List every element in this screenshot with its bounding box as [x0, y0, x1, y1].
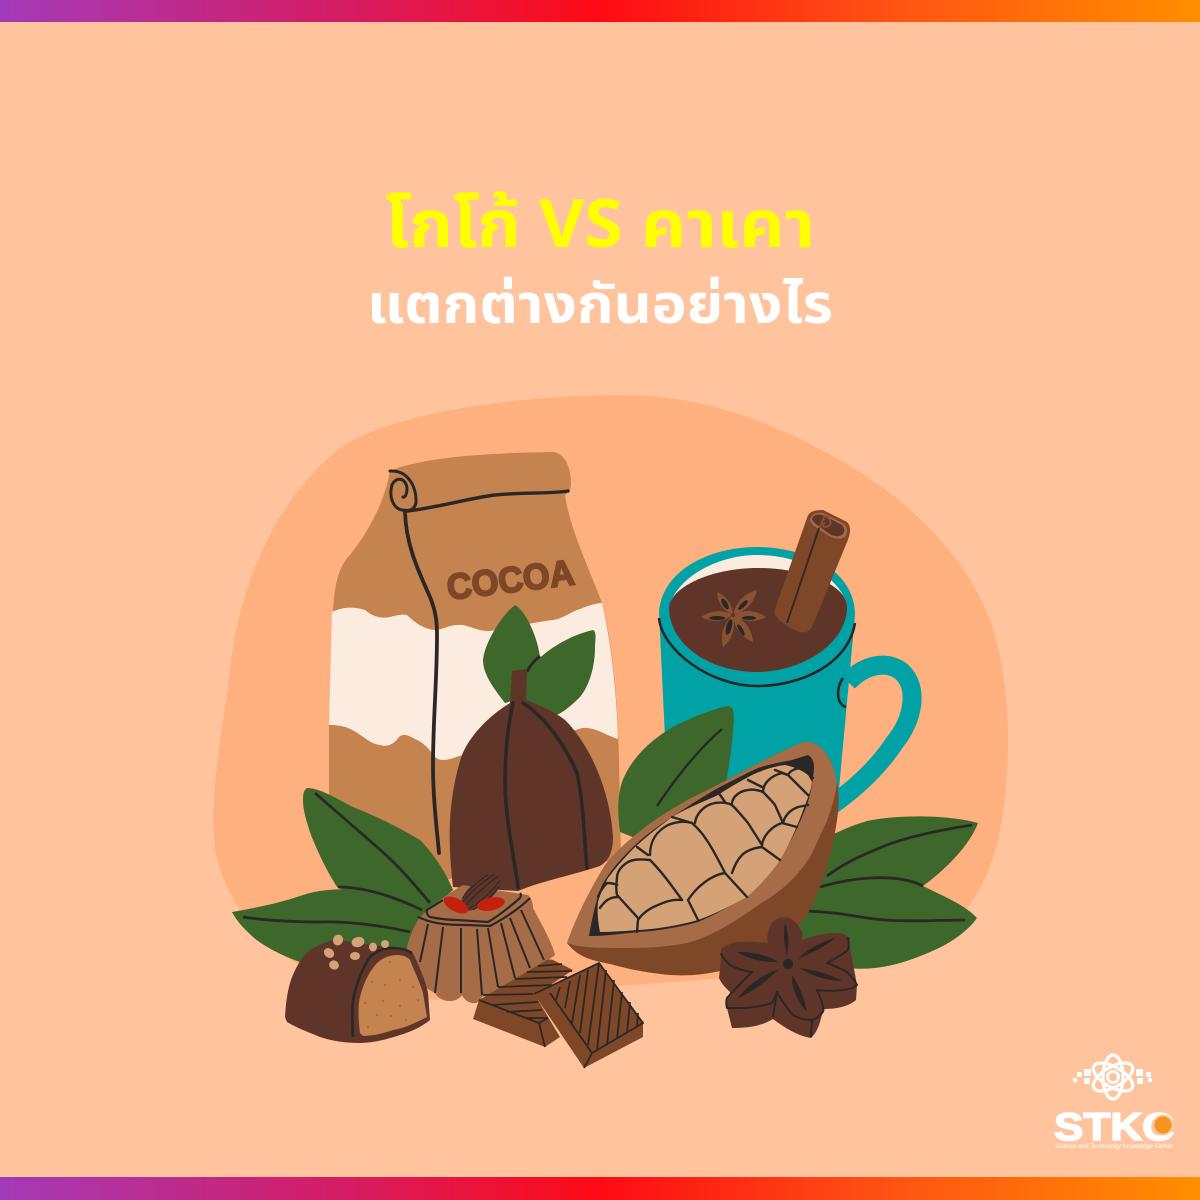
logo orange dot	[1154, 1116, 1172, 1134]
star anise lines	[721, 937, 857, 1037]
top gradient bar	[0, 0, 1200, 22]
cacao beans fill	[598, 765, 812, 932]
pod rim	[567, 742, 837, 948]
bag body	[329, 452, 621, 880]
bag label: COCOA	[445, 551, 577, 608]
pod body	[450, 669, 613, 891]
pod ridges	[505, 703, 587, 888]
front piece shape	[534, 963, 643, 1068]
open cacao pod	[567, 742, 839, 975]
stick tube	[775, 510, 850, 632]
chocolate pieces	[473, 960, 643, 1068]
leaf shape	[618, 706, 734, 840]
stick seam	[787, 528, 819, 623]
truffle	[285, 933, 430, 1043]
upper left leaf	[303, 788, 453, 925]
small star anise	[701, 590, 766, 647]
mug handle	[832, 665, 912, 805]
logo tagline: Science and Technology Knowledge Center	[1055, 1144, 1173, 1150]
right leaf veins	[807, 825, 972, 921]
mug body	[659, 547, 855, 800]
background blob	[213, 395, 1008, 1000]
lower left leaf	[232, 889, 422, 962]
chocolate body	[407, 885, 555, 1003]
star anise side	[719, 937, 857, 1038]
leaf junction line	[527, 656, 540, 672]
bag white band	[329, 603, 618, 760]
star anise large	[719, 917, 857, 1038]
bean outlines	[598, 768, 813, 932]
truffle nuts	[322, 933, 389, 971]
left leaf veins	[243, 793, 430, 932]
mug of hot chocolate	[659, 510, 912, 805]
handle joint mark	[838, 678, 846, 707]
leaf vein	[657, 729, 722, 806]
logo atom icon	[1089, 1055, 1137, 1099]
filling specks	[364, 961, 419, 1028]
title line 2: แตกต่างกันอย่างไร	[367, 267, 833, 348]
upper right leaf	[815, 816, 978, 890]
chocolate piece front	[534, 963, 643, 1068]
cocoa pod whole with leaves	[450, 605, 613, 891]
pod shell	[567, 742, 839, 975]
fluted chocolate	[407, 867, 555, 1003]
back piece faces	[473, 960, 573, 1047]
almond	[455, 867, 507, 917]
mug inner lining	[670, 555, 847, 604]
lower right leaf	[790, 879, 977, 969]
bag fold lines	[390, 471, 568, 853]
mug rim shadow	[659, 618, 855, 686]
front piece lines	[534, 963, 643, 1068]
chocolate piece back	[473, 960, 573, 1047]
star anise seeds	[737, 923, 842, 1012]
logo wordmark: STKC	[1054, 1106, 1174, 1149]
pod inner cavity	[589, 755, 814, 936]
right leaves	[790, 816, 978, 969]
back piece lines	[479, 964, 572, 1047]
hot chocolate surface	[669, 568, 847, 672]
title line 1: โกโก้ VS คาเคา	[385, 177, 815, 277]
stick end rim	[810, 513, 847, 539]
flute lines	[420, 910, 544, 995]
star anise top	[721, 917, 857, 1020]
truffle filling	[358, 955, 427, 1036]
cinnamon stick	[775, 510, 850, 632]
leaf behind open pod	[618, 706, 734, 840]
bottom gradient bar	[0, 1177, 1200, 1200]
left leaves	[232, 788, 453, 962]
illustration: cocoa products	[213, 395, 1008, 1068]
truffle shell line	[352, 948, 412, 1037]
stick curl	[819, 515, 831, 528]
plate outline	[418, 893, 530, 926]
cocoa bag	[329, 452, 621, 880]
logo pixel squares	[1073, 1069, 1152, 1084]
stick end	[812, 515, 844, 536]
pod leaves	[483, 605, 596, 716]
logo STKC	[1054, 1055, 1174, 1150]
goji berries	[441, 893, 506, 917]
truffle shell	[285, 940, 430, 1043]
title	[367, 177, 833, 348]
